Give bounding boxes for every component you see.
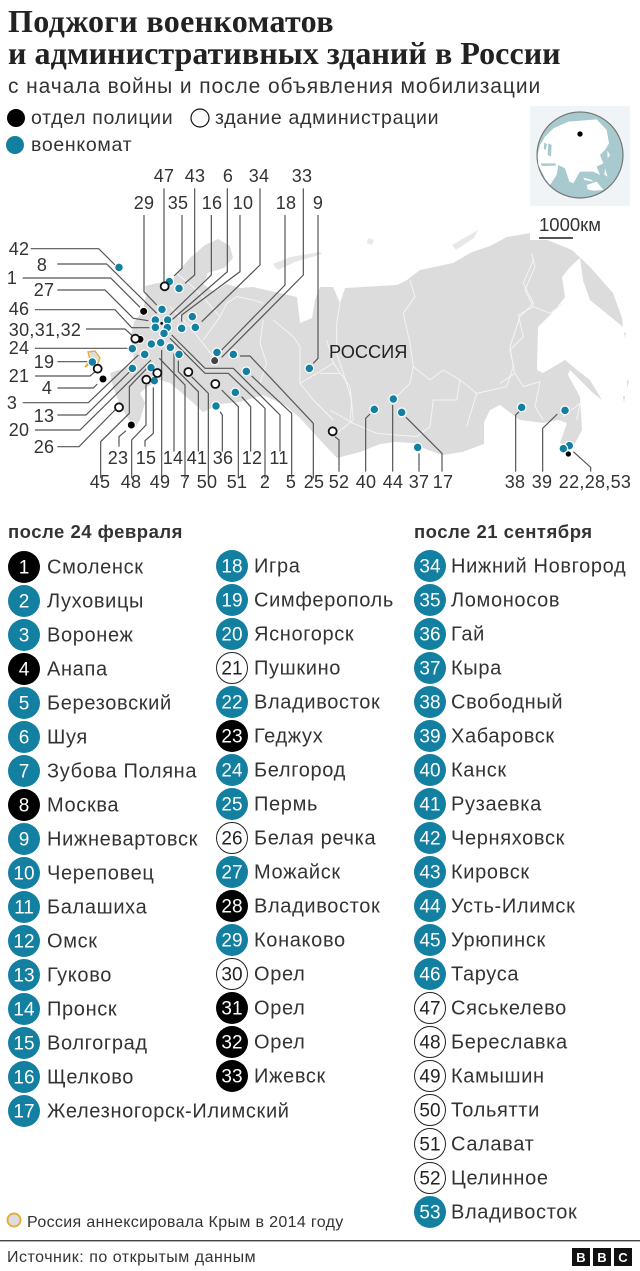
region borders west (170, 273, 353, 433)
list column 3: 47 (419, 998, 441, 1020)
list column 2: Орел (254, 998, 305, 1020)
list column 3: Салават (451, 1134, 534, 1156)
BBC logo: B (576, 1250, 586, 1265)
map number labels: 49 (150, 472, 170, 492)
list column 1: 17 (13, 1102, 35, 1122)
list column 3: 38 (419, 692, 441, 714)
list column 2: 20 (221, 624, 243, 646)
list column 2: 30 (221, 964, 243, 986)
list column 3: 36 (419, 624, 441, 646)
subtitle: с начала войны и после объявления мобилизации (8, 75, 541, 98)
list column 2: Пушкино (254, 658, 341, 680)
map number labels: 42 (9, 239, 29, 259)
map number labels: 17 (433, 472, 453, 492)
list column 3: Свободный (451, 692, 563, 714)
list column 2: 21 (221, 658, 243, 680)
list column 2: 31 (221, 998, 243, 1020)
list column 3: 44 (419, 896, 441, 918)
list column 1: Анапа (47, 658, 108, 680)
list column 1: 1 (19, 558, 29, 578)
map number labels: 16 (202, 193, 222, 213)
map markers west (88, 263, 314, 429)
list column 1: Щелково (47, 1066, 134, 1088)
map number labels: 50 (197, 472, 217, 492)
heading: after 24 February: после 24 февраля (8, 521, 183, 542)
list column 1: 15 (13, 1034, 35, 1054)
list column 1: Железногорск-Илимский (47, 1100, 290, 1122)
heading: after 21 September: после 21 сентября (414, 521, 593, 542)
list column 3: Рузаевка (451, 794, 542, 816)
list column 2: 22 (221, 692, 243, 714)
list column 1: 2 (19, 592, 29, 612)
list column 2: 19 (221, 590, 243, 612)
legend (6, 107, 439, 156)
map number labels: 22,28,53 (559, 472, 631, 492)
region borders far east (500, 253, 580, 420)
list column 2: Владивосток (254, 896, 380, 918)
list column 2: Орел (254, 964, 305, 986)
legend: enlistment office: военкомат (31, 134, 132, 156)
BBC logo (572, 1248, 632, 1266)
map number labels: 14 (163, 448, 183, 468)
title: и административных зданий в России (8, 35, 561, 71)
map of Russia (85, 230, 629, 458)
list column 1: Нижневартовск (47, 828, 198, 850)
list column 3: Кировск (451, 862, 530, 884)
list column 3: Сяськелево (451, 998, 567, 1020)
list column 1: Балашиха (47, 896, 148, 918)
map number labels: 52 (329, 472, 349, 492)
list column 1: 4 (19, 660, 30, 680)
list column 2: Конаково (254, 930, 346, 952)
map number labels: 2 (260, 472, 270, 492)
list column 2 (216, 550, 394, 1092)
list column 3: Целинное (451, 1168, 549, 1190)
list column 1: 6 (19, 728, 29, 748)
list column 2: Ижевск (254, 1066, 326, 1088)
map number labels: 19 (34, 352, 54, 372)
list column 2: Белгород (254, 760, 346, 782)
map number labels: 5 (286, 472, 296, 492)
list column 3: 37 (419, 658, 441, 680)
list column 1: 7 (19, 762, 29, 782)
list column 3: Гай (451, 624, 485, 646)
list column 2: 24 (221, 760, 243, 782)
list column 2: Пермь (254, 794, 318, 816)
list column 3: Кыра (451, 658, 502, 680)
list column 1: 10 (13, 864, 35, 884)
list column 3: 43 (419, 862, 441, 884)
list column 3: 39 (419, 726, 441, 748)
region borders east (320, 260, 533, 437)
list column 3: Ломоносов (451, 590, 560, 612)
list column 1: 9 (19, 830, 29, 850)
list column 2: 27 (221, 862, 243, 884)
list column 2: 25 (221, 794, 243, 816)
map number labels: 9 (313, 193, 323, 213)
list column 1 (8, 551, 290, 1127)
list column 3: 50 (419, 1100, 441, 1122)
map number labels: 47 (154, 166, 174, 186)
list column 3: Нижний Новгород (451, 556, 626, 578)
map number labels: 37 (409, 472, 429, 492)
list column 1: 11 (14, 898, 34, 918)
list column 2: Белая речка (254, 828, 376, 850)
list column 2: 33 (221, 1066, 243, 1088)
map number labels: 41 (187, 448, 207, 468)
map number labels: 25 (304, 472, 324, 492)
list column 3: 40 (419, 760, 441, 782)
list column 3: 46 (419, 964, 441, 986)
list column 3: Владивосток (451, 1202, 577, 1224)
list column 1: Воронеж (47, 624, 134, 646)
title: Поджоги военкоматов (8, 3, 334, 39)
list column 1: Шуя (47, 726, 88, 748)
map number labels: 8 (37, 255, 47, 275)
map number labels: 48 (121, 472, 141, 492)
list column 2: 18 (221, 556, 243, 578)
list column 3: Черняховск (451, 828, 565, 850)
map number labels: 3 (7, 393, 17, 413)
list column 1: Зубова Поляна (47, 760, 197, 782)
list column 2: 29 (221, 930, 243, 952)
map number labels: 20 (9, 420, 29, 440)
list column 1: Луховицы (47, 590, 144, 612)
list column 2: Геджух (254, 726, 323, 748)
list column 2: Можайск (254, 862, 341, 884)
map number labels: 30,31,32 (9, 320, 81, 340)
list column 3: 52 (419, 1168, 441, 1190)
map number labels: 29 (134, 193, 154, 213)
list column 3: 34 (419, 556, 441, 578)
map number labels: 27 (34, 280, 54, 300)
legend: administration: здание администрации (215, 107, 439, 129)
list column 1: 16 (13, 1068, 35, 1088)
scale bar: 1000км (539, 214, 601, 235)
map number labels: 34 (249, 166, 269, 186)
list column 1: 5 (19, 694, 29, 714)
map number labels: 45 (90, 472, 110, 492)
map number labels: 4 (42, 378, 52, 398)
leader lines east (335, 405, 591, 472)
map number labels: 26 (34, 437, 54, 457)
list column 1: 14 (13, 1000, 35, 1020)
locator globe (530, 106, 630, 206)
list column 3: 35 (419, 590, 441, 612)
map number labels: 39 (532, 472, 552, 492)
map number labels: 44 (383, 472, 403, 492)
leader lines (23, 188, 318, 478)
list column 2: Ясногорск (254, 624, 354, 646)
list column 3: 42 (419, 828, 441, 850)
list column 1: Москва (47, 794, 119, 816)
list column 2: 32 (221, 1032, 243, 1054)
scale bar (530, 207, 615, 240)
map number labels: 51 (227, 472, 247, 492)
list column 3: 48 (419, 1032, 441, 1054)
map number labels: 35 (168, 193, 188, 213)
map number labels: 23 (108, 448, 128, 468)
list column 1: 12 (13, 932, 35, 952)
map number labels: 11 (269, 448, 289, 468)
list column 2: Орел (254, 1032, 305, 1054)
list column 2: Владивосток (254, 692, 380, 714)
BBC logo: C (618, 1250, 628, 1265)
list column 1: Березовский (47, 692, 172, 714)
list column 1: Гуково (47, 964, 112, 986)
map number labels: 21 (9, 366, 29, 386)
list column 3: 53 (419, 1202, 441, 1224)
map number labels: 38 (505, 472, 525, 492)
title (8, 3, 561, 71)
list column 1: 13 (13, 966, 35, 986)
list column 1: 8 (19, 796, 29, 816)
map number labels: 18 (276, 193, 296, 213)
map number labels: 1 (7, 268, 17, 288)
list column 2: Симферополь (254, 590, 394, 612)
map number labels: 12 (242, 448, 262, 468)
map number labels (7, 166, 631, 492)
list column 3: 51 (419, 1134, 441, 1156)
list column 1: Волгоград (47, 1032, 148, 1054)
list column 3: Тольятти (451, 1100, 540, 1122)
list column 2: Игра (254, 556, 301, 578)
map number labels: 7 (180, 472, 190, 492)
source: Источник: по открытым данным (7, 1249, 256, 1266)
list column 3: 41 (419, 794, 441, 816)
list column 3 (414, 550, 626, 1228)
list column 1: Омск (47, 930, 98, 952)
list column 3: Канск (451, 760, 507, 782)
list column 3: Береславка (451, 1032, 568, 1054)
list column 1: 3 (19, 626, 29, 646)
list column 3: Хабаровск (451, 726, 555, 748)
list column 1: Череповец (47, 862, 154, 884)
map markers east (329, 395, 574, 457)
map number labels: 15 (136, 448, 156, 468)
list column 3: Урюпинск (451, 930, 546, 952)
list column 1: Пронск (47, 998, 117, 1020)
label: РОССИЯ: РОССИЯ (329, 342, 407, 362)
BBC logo: B (597, 1250, 607, 1265)
map number labels: 40 (356, 472, 376, 492)
list column 3: 49 (419, 1066, 441, 1088)
list column 3: Камышин (451, 1066, 545, 1088)
list column 2: 23 (221, 726, 243, 748)
legend: police: отдел полиции (31, 107, 173, 129)
list column 3: Таруса (451, 964, 519, 986)
map number labels: 36 (213, 448, 233, 468)
map number labels: 13 (34, 406, 54, 426)
map number labels: 6 (223, 166, 233, 186)
list column 2: 26 (221, 828, 243, 850)
list column 3: Усть-Илимск (451, 896, 575, 918)
map number labels: 33 (292, 166, 312, 186)
map number labels: 46 (9, 299, 29, 319)
list column 3: 45 (419, 930, 441, 952)
list column 1: Смоленск (47, 556, 144, 578)
map number labels: 10 (233, 193, 253, 213)
list column 2: 28 (221, 896, 243, 918)
map number labels: 24 (9, 338, 29, 358)
map number labels: 43 (185, 166, 205, 186)
crimea note: Россия аннексировала Крым в 2014 году (27, 1214, 344, 1231)
